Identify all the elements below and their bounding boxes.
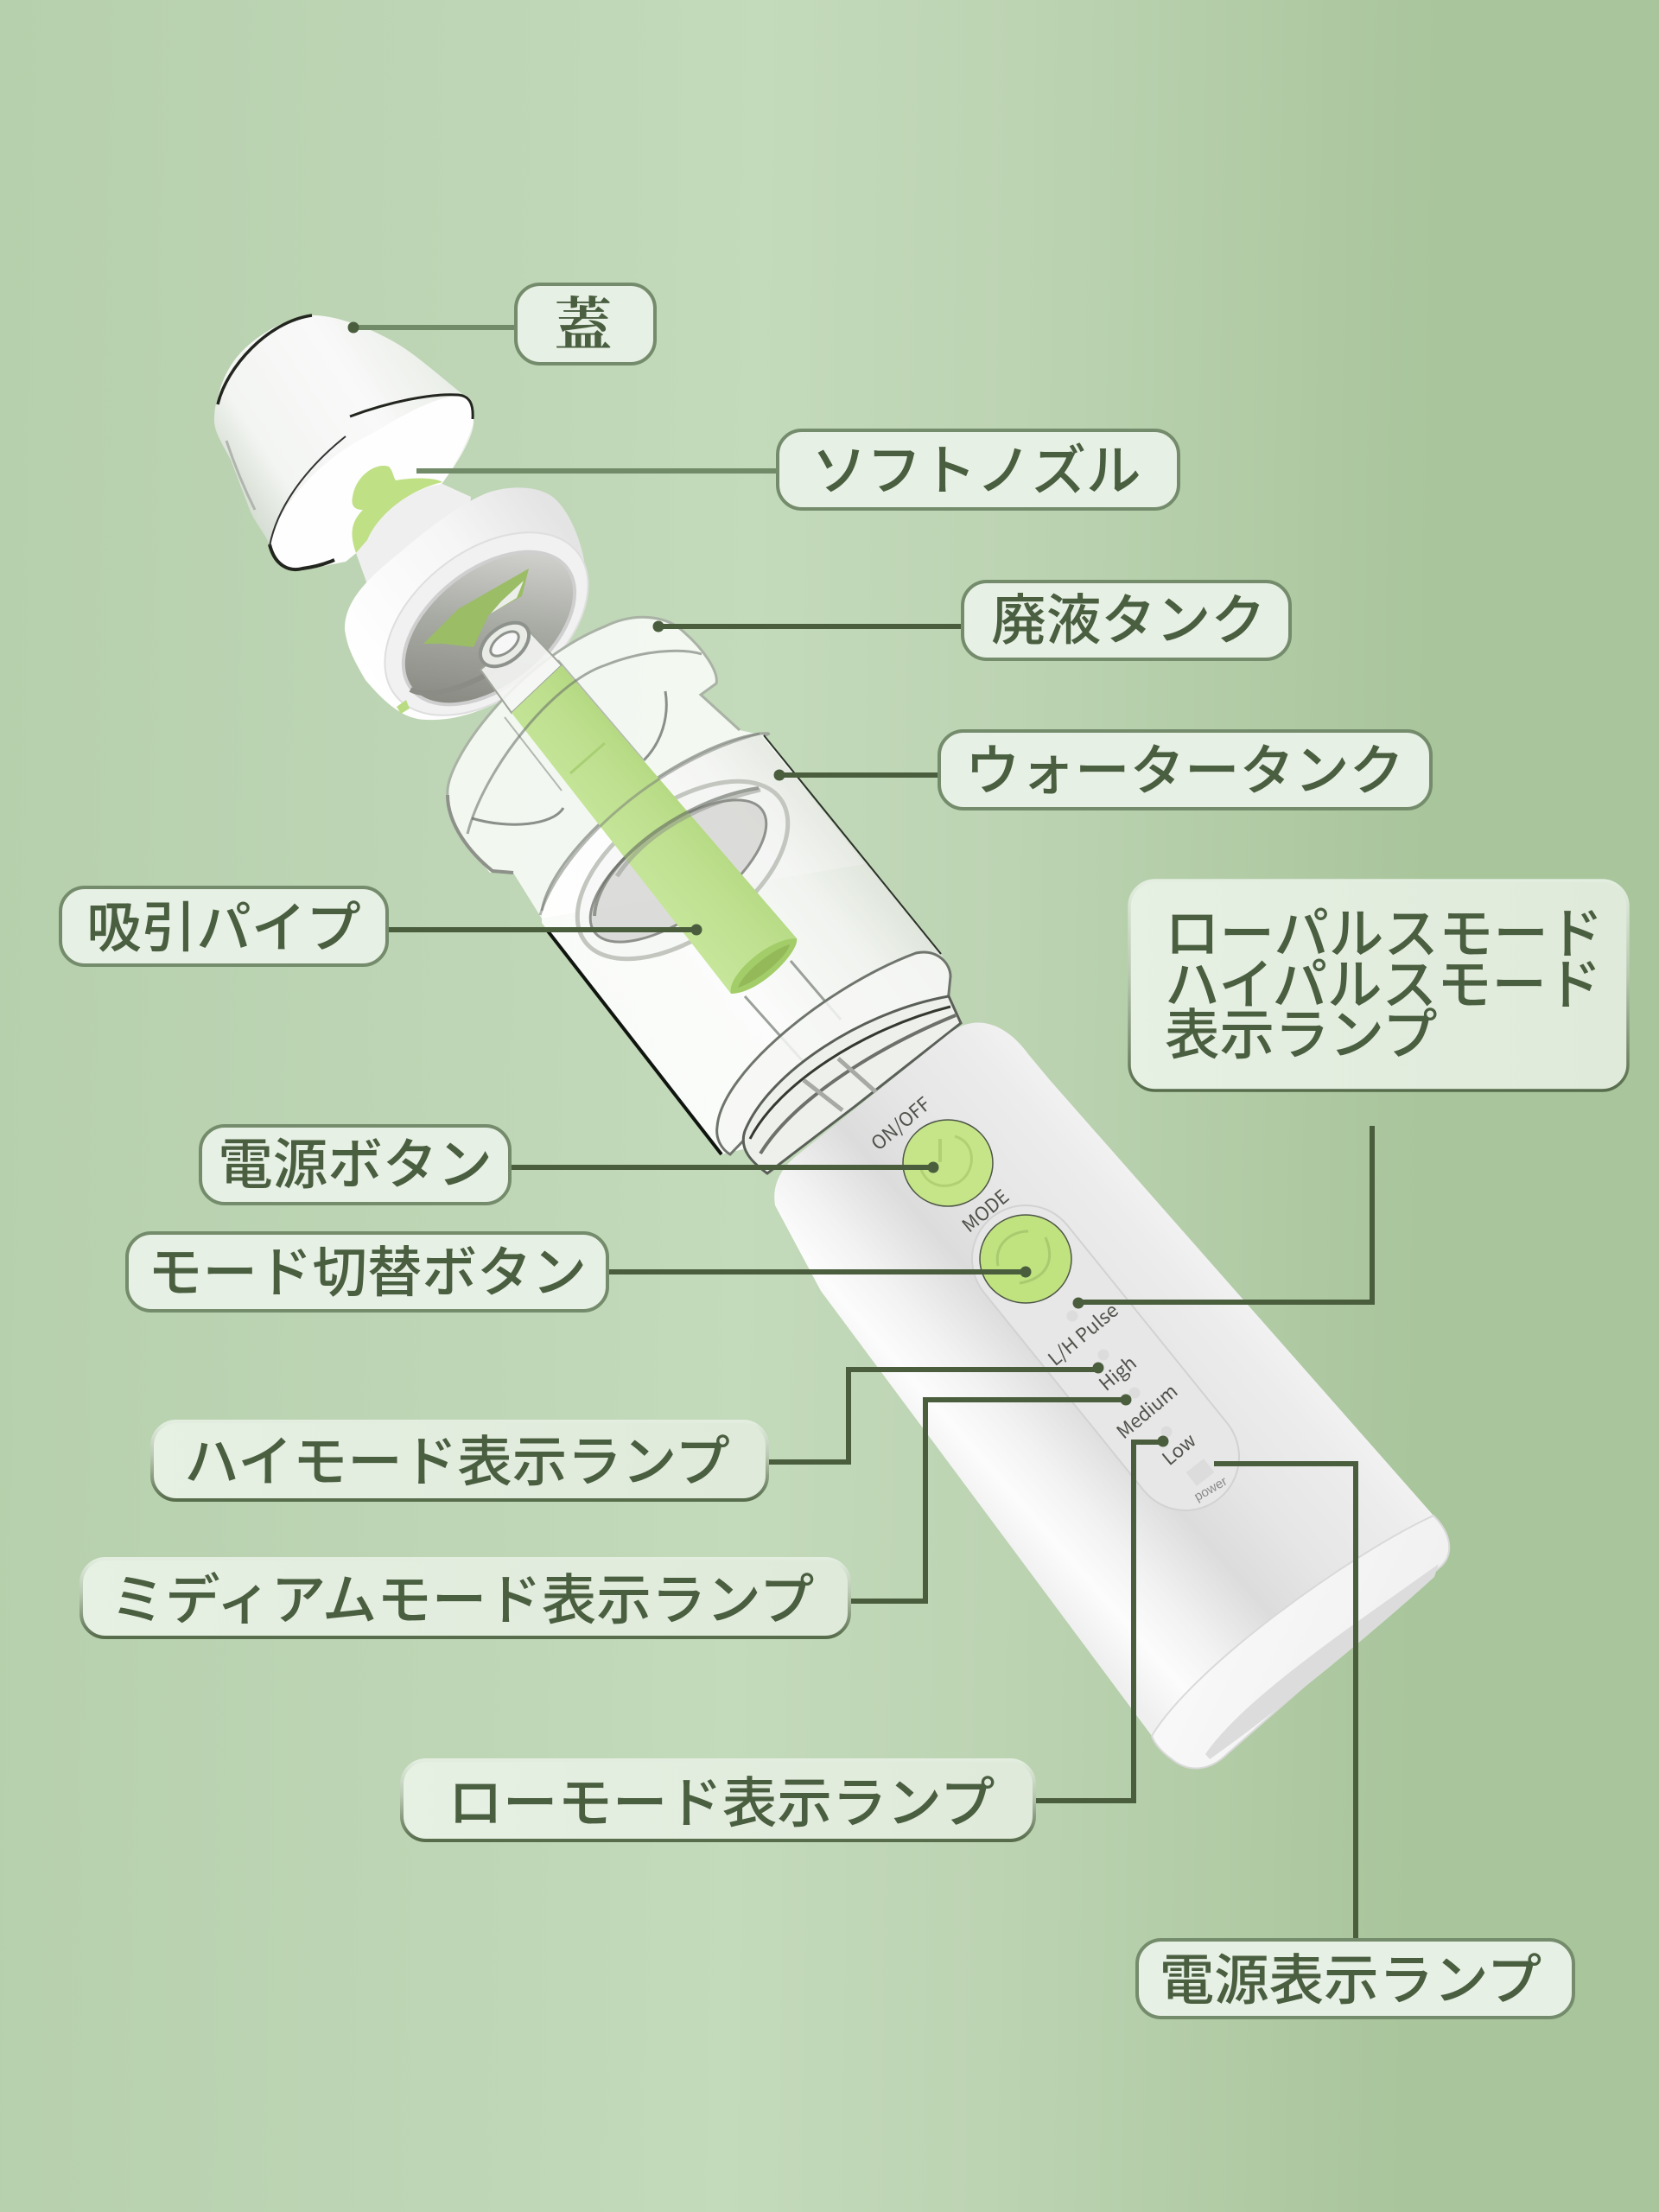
indicator labels and lamps: Low xyxy=(1155,1426,1202,1471)
part: main body xyxy=(774,1022,1449,1768)
label: ローパルスモード ハイパルスモード 表示ランプ: ハイパルスモード xyxy=(1165,956,1601,1016)
label: 電源表示ランプ: 電源表示ランプ xyxy=(1160,1951,1541,2012)
part: cap xyxy=(214,315,474,569)
indicator labels and lamps: Medium xyxy=(1109,1376,1183,1445)
part: water tank lower rim and threaded neck xyxy=(717,952,961,1173)
detail: rim lines across tanks xyxy=(467,651,760,916)
label: 電源表示ランプ xyxy=(1137,1464,1573,2018)
label: ウォータータンク: ウォータータンク xyxy=(965,741,1404,802)
label: 電源ボタン xyxy=(200,1126,938,1204)
label: ローパルスモード ハイパルスモード 表示ランプ xyxy=(1073,880,1628,1308)
label: ハイモード表示ランプ: ハイモード表示ランプ xyxy=(184,1433,730,1493)
part: green suction pipe xyxy=(512,665,797,994)
indicator labels and lamps: High xyxy=(1092,1349,1141,1396)
label: ウォータータンク xyxy=(774,731,1431,809)
button: ON/OFF xyxy=(864,1090,993,1206)
label: 吸引パイプ: 吸引パイプ xyxy=(86,899,361,959)
indicator labels and lamps: L/H Pulse xyxy=(1041,1296,1123,1371)
part: water tank xyxy=(542,734,950,1154)
label: 吸引パイプ xyxy=(60,887,702,965)
label: ミディアムモード表示ランプ xyxy=(81,1395,1132,1637)
label: 蓋 xyxy=(347,284,655,364)
detail: control panel capsule xyxy=(1026,1259,1185,1457)
label: ハイモード表示ランプ xyxy=(152,1362,1104,1500)
label: 蓋: 蓋 xyxy=(555,294,612,357)
button: ON/OFF: ON/OFF xyxy=(864,1090,936,1156)
label: モード切替ボタン xyxy=(127,1233,1032,1311)
button: MODE xyxy=(956,1182,1071,1303)
detail: base cap xyxy=(1152,1516,1449,1768)
part: suction pipe (glass section) xyxy=(472,614,841,1061)
detail: inner ring of water tank xyxy=(546,746,819,995)
label: ミディアムモード表示ランプ: ミディアムモード表示ランプ xyxy=(111,1571,814,1631)
button: MODE: MODE xyxy=(956,1182,1014,1238)
label: 電源ボタン: 電源ボタン xyxy=(218,1135,493,1196)
indicator labels and lamps xyxy=(1041,1296,1230,1504)
part: soft nozzle and white flange xyxy=(345,466,622,753)
label: ローパルスモード ハイパルスモード 表示ランプ: 表示ランプ xyxy=(1165,1006,1438,1066)
label: ローモード表示ランプ: ローモード表示ランプ xyxy=(448,1774,995,1834)
label: ローモード表示ランプ xyxy=(402,1436,1168,1840)
part: waste tank xyxy=(448,617,864,918)
product: nasal irrigator exploded view xyxy=(214,315,1449,1768)
label: 廃液タンク: 廃液タンク xyxy=(991,591,1266,652)
label: ローパルスモード ハイパルスモード 表示ランプ: ローパルスモード xyxy=(1165,905,1603,965)
label: 廃液タンク xyxy=(653,582,1290,659)
label: モード切替ボタン: モード切替ボタン xyxy=(148,1243,587,1304)
indicator labels and lamps: power xyxy=(1192,1474,1230,1504)
label: ソフトノズル: ソフトノズル xyxy=(812,442,1141,502)
label: ソフトノズル xyxy=(416,430,1179,509)
